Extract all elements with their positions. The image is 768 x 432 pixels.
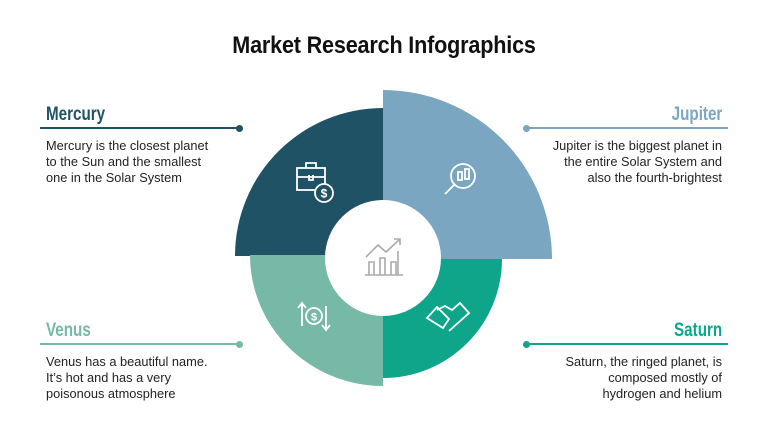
icon: briefcase dollar: $ bbox=[321, 186, 328, 200]
icon: handshake bbox=[427, 303, 469, 331]
center circle bbox=[325, 200, 441, 316]
text: Saturn: hydrogen and helium bbox=[602, 386, 722, 401]
text: Saturn: Saturn, the ringed planet, is bbox=[565, 354, 722, 369]
text: Mercury: one in the Solar System bbox=[46, 170, 182, 185]
title: Market Research Infographics bbox=[232, 32, 536, 59]
text: Saturn: composed mostly of bbox=[608, 370, 722, 385]
text: Saturn bbox=[565, 354, 722, 401]
icon: money exchange bbox=[298, 303, 330, 330]
text: Venus: Venus has a beautiful name. bbox=[46, 354, 208, 369]
text: Mercury: to the Sun and the smallest bbox=[46, 154, 201, 169]
heading: Saturn: Saturn bbox=[674, 320, 722, 341]
text: Jupiter: the entire Solar System and bbox=[564, 154, 722, 169]
line: Saturn bbox=[526, 343, 728, 345]
line: Mercury bbox=[40, 127, 240, 129]
icon: money exchange: $ bbox=[311, 312, 317, 324]
icon: chart growth bbox=[365, 239, 403, 275]
segment: Venus bbox=[250, 255, 383, 386]
text: Jupiter: also the fourth-brightest bbox=[588, 170, 722, 185]
text: Jupiter: Jupiter is the biggest planet in bbox=[553, 138, 722, 153]
heading: Jupiter: Jupiter bbox=[671, 104, 722, 125]
icon: magnifier candles bbox=[445, 164, 475, 194]
text: Jupiter bbox=[553, 138, 722, 185]
icon: briefcase dollar bbox=[297, 163, 333, 202]
text: Venus: poisonous atmosphere bbox=[46, 386, 175, 401]
segment: Saturn bbox=[383, 259, 502, 378]
heading: Mercury: Mercury bbox=[46, 104, 105, 125]
segment: Mercury bbox=[235, 108, 383, 256]
line: Venus bbox=[40, 343, 240, 345]
segment: Jupiter bbox=[383, 90, 552, 259]
heading: Venus: Venus bbox=[46, 320, 91, 341]
text: Mercury: Mercury is the closest planet bbox=[46, 138, 208, 153]
line: Jupiter bbox=[526, 127, 728, 129]
text: Mercury bbox=[46, 138, 208, 185]
text: Venus bbox=[46, 354, 208, 401]
text: Venus: It’s hot and has a very bbox=[46, 370, 171, 385]
